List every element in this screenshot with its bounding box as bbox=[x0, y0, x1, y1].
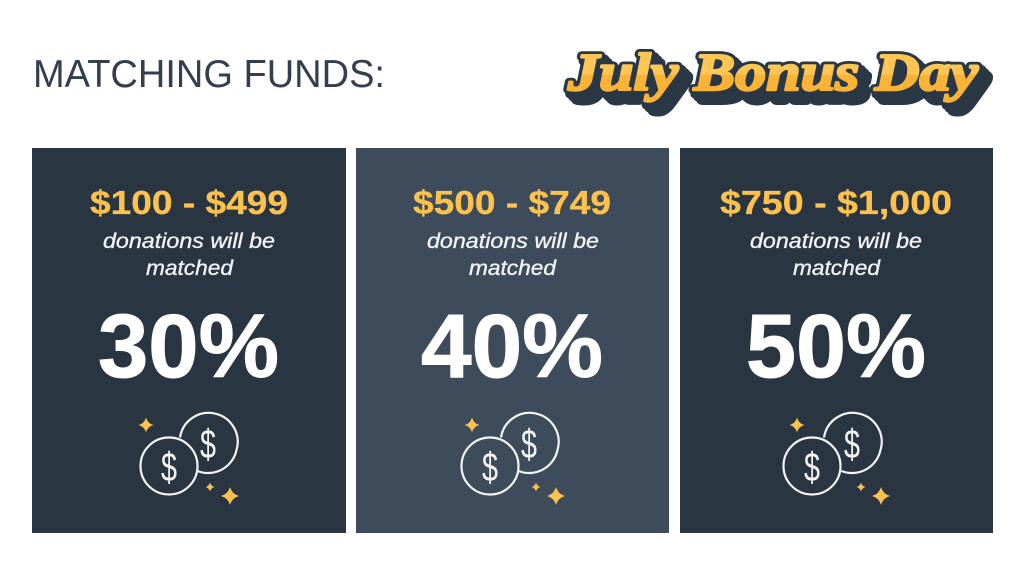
logo: July Bonus Day: July Bonus Day bbox=[570, 48, 982, 106]
panel: 30% match bbox=[32, 148, 346, 533]
logo: July Bonus Day: July Bonus Day bbox=[567, 44, 979, 102]
description bbox=[103, 229, 275, 280]
icon: coins with sparkles: $ bbox=[844, 421, 860, 467]
percentage: 50% bbox=[746, 297, 926, 397]
description bbox=[750, 229, 922, 280]
percentage: 40% bbox=[421, 297, 603, 397]
icon: coins with sparkles: $ bbox=[161, 444, 177, 490]
donation range: $750 - $1,000 bbox=[720, 184, 952, 221]
icon: coins with sparkles bbox=[138, 413, 239, 505]
icon: coins with sparkles: $ bbox=[200, 421, 216, 467]
panel: 40% match bbox=[356, 148, 669, 533]
title: matching funds: MATCHING FUNDS: bbox=[33, 53, 385, 96]
description: donations will be bbox=[750, 229, 922, 253]
icon: coins with sparkles bbox=[784, 413, 890, 505]
donation range: $100 - $499 bbox=[90, 184, 288, 221]
donation range: $500 - $749 bbox=[413, 184, 611, 221]
description: matched bbox=[469, 256, 557, 280]
description: matched bbox=[146, 256, 234, 280]
icon: coins with sparkles: $ bbox=[521, 421, 537, 467]
description bbox=[427, 229, 599, 280]
logo: July Bonus Day: July Bonus Day bbox=[576, 54, 988, 112]
description: donations will be bbox=[103, 229, 275, 253]
percentage: 30% bbox=[98, 297, 279, 397]
description: donations will be bbox=[427, 229, 599, 253]
description: matched bbox=[793, 256, 881, 280]
icon: coins with sparkles: $ bbox=[804, 444, 820, 490]
panel: 50% match bbox=[680, 148, 993, 533]
logo: July Bonus Day: July Bonus Day bbox=[573, 51, 985, 109]
icon: coins with sparkles: $ bbox=[482, 444, 498, 490]
icon: coins with sparkles bbox=[462, 413, 565, 505]
logo: July Bonus Day: July Bonus Day bbox=[567, 44, 979, 102]
